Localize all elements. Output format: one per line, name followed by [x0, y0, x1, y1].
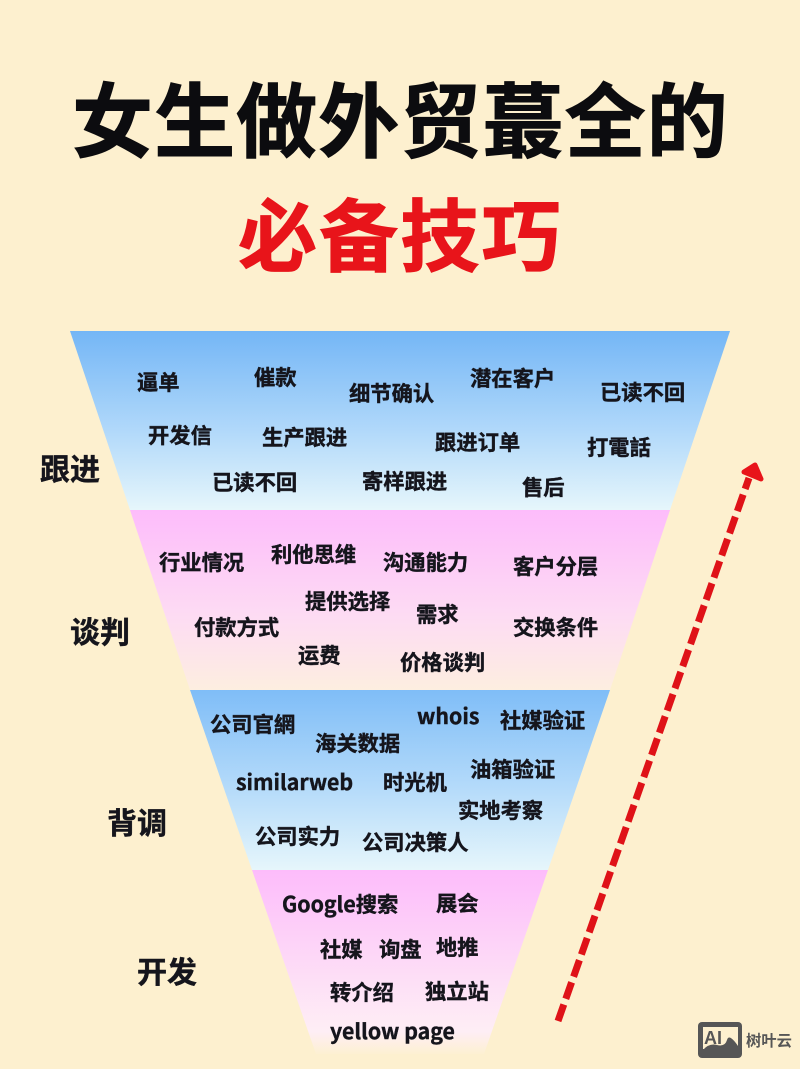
funnel tier: 谈判: 沟通能力	[383, 546, 468, 577]
funnel tier: 开发: 询盘	[379, 933, 422, 964]
funnel tier: 背调: 公司官網	[210, 708, 295, 739]
watermark: AI 树叶云: 树叶云	[746, 1032, 792, 1050]
label: 跟进: 跟进	[40, 454, 100, 487]
funnel tier: 背调: 时光机	[383, 766, 448, 797]
funnel tier: 谈判: 客户分层	[513, 550, 598, 581]
funnel tier: 跟进: 已读不回	[600, 376, 685, 407]
funnel tier: 跟进: 生产跟进	[262, 421, 347, 452]
funnel tier: 跟进: 售后	[522, 471, 565, 502]
funnel tier: 跟进: 细节确认	[349, 377, 434, 408]
funnel tier: 跟进: 开发信	[148, 419, 212, 450]
funnel tier: 背调: 实地考察	[458, 794, 543, 825]
funnel tier: 跟进	[70, 331, 730, 510]
funnel tier: 跟进: 催款	[254, 361, 297, 392]
funnel tier: 背调: 社媒验证	[500, 704, 585, 735]
funnel tier: 开发: Google搜索	[282, 888, 398, 919]
title: 女生做外贸蕞全的	[72, 79, 729, 169]
funnel tier: 跟进: 跟进订单	[435, 426, 520, 457]
funnel tier: 谈判: 提供选择	[305, 585, 391, 616]
funnel tier: 背调: whois	[417, 700, 479, 731]
title: 必备技巧	[238, 193, 563, 282]
funnel tier: 背调: 海关数据	[315, 727, 400, 758]
label: 背调: 背调	[107, 808, 167, 841]
funnel tier: 谈判: 交换条件	[513, 611, 598, 642]
label: 谈判: 谈判	[70, 617, 130, 650]
funnel tier: 开发: 社媒	[320, 933, 363, 964]
watermark: AI 树叶云	[698, 1022, 792, 1058]
funnel tier: 跟进: 逼单	[137, 366, 180, 397]
funnel tier: 跟进: 已读不回	[212, 466, 297, 497]
funnel tier: 跟进: 潜在客户	[470, 362, 555, 393]
funnel tier: 开发: 转介绍	[330, 976, 394, 1007]
funnel tier: 背调: 油箱验证	[470, 753, 555, 784]
funnel tier: 跟进: 打電話	[587, 431, 651, 462]
funnel tier: 谈判: 运费	[298, 639, 341, 670]
funnel tier: 谈判: 利他思维	[271, 538, 356, 569]
funnel tier: 跟进: 寄样跟进	[362, 465, 447, 496]
title	[72, 79, 729, 282]
funnel tier: 背调: 公司决策人	[362, 826, 468, 857]
watermark: AI 树叶云: AI	[704, 1028, 722, 1048]
funnel tier: 开发: 地推	[436, 931, 479, 962]
funnel tier: 背调: 公司实力	[255, 820, 340, 851]
funnel tier: 开发: yellow page	[330, 1015, 455, 1046]
funnel tier: 背调	[190, 690, 610, 870]
arrow: upward dashed red	[558, 465, 761, 1021]
funnel tier: 开发	[252, 870, 548, 1054]
funnel tier: 谈判: 行业情况	[159, 546, 244, 577]
funnel tier: 谈判	[130, 510, 670, 690]
funnel tier: 谈判: 价格谈判	[400, 646, 485, 677]
funnel tier: 开发: 独立站	[425, 975, 489, 1006]
funnel tier: 开发: 展会	[436, 887, 479, 918]
funnel tier: 背调: similarweb	[236, 766, 353, 797]
label: 开发: 开发	[137, 957, 197, 990]
funnel tier: 谈判: 付款方式	[194, 611, 279, 642]
funnel tier: 谈判: 需求	[416, 598, 459, 629]
